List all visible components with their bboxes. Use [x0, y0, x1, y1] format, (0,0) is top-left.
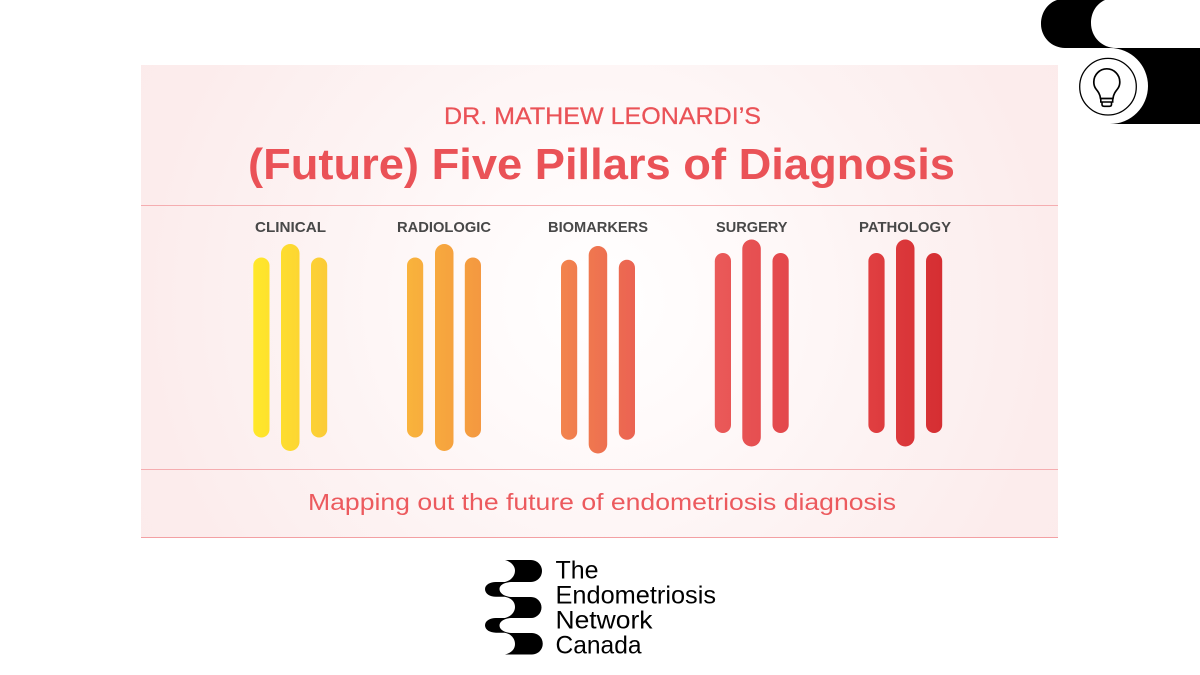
pillar: radiologic	[397, 219, 491, 451]
pillar: biomarkers	[548, 219, 648, 454]
tagline: Mapping out the future of endometriosis diagnosis	[308, 489, 896, 515]
pillar: clinical: CLINICAL	[255, 219, 326, 236]
logo wordmark	[556, 556, 716, 660]
pillar: surgery: SURGERY	[716, 219, 788, 236]
logo wordmark: The	[556, 556, 598, 584]
corner brand shape with lightbulb badge	[1041, 0, 1200, 124]
pillar: surgery	[715, 219, 789, 446]
pillar: pathology: PATHOLOGY	[859, 219, 951, 236]
subtitle: DR. MATHEW LEONARDI’S	[444, 103, 761, 130]
icon: logo mark	[485, 560, 543, 654]
logo: The Endometriosis Network Canada	[485, 556, 716, 660]
title: (Future) Five Pillars of Diagnosis	[248, 140, 955, 189]
logo wordmark: Network	[556, 606, 653, 634]
pillar: pathology	[859, 219, 951, 446]
icon: lightbulb in circle	[1080, 58, 1136, 115]
pillar: biomarkers: BIOMARKERS	[548, 219, 648, 236]
pillar: radiologic: RADIOLOGIC	[397, 219, 491, 236]
logo wordmark: Canada	[556, 632, 642, 660]
logo wordmark: Endometriosis	[556, 582, 716, 610]
pillar: clinical	[253, 219, 327, 451]
panel: five pillars card	[141, 65, 1058, 538]
